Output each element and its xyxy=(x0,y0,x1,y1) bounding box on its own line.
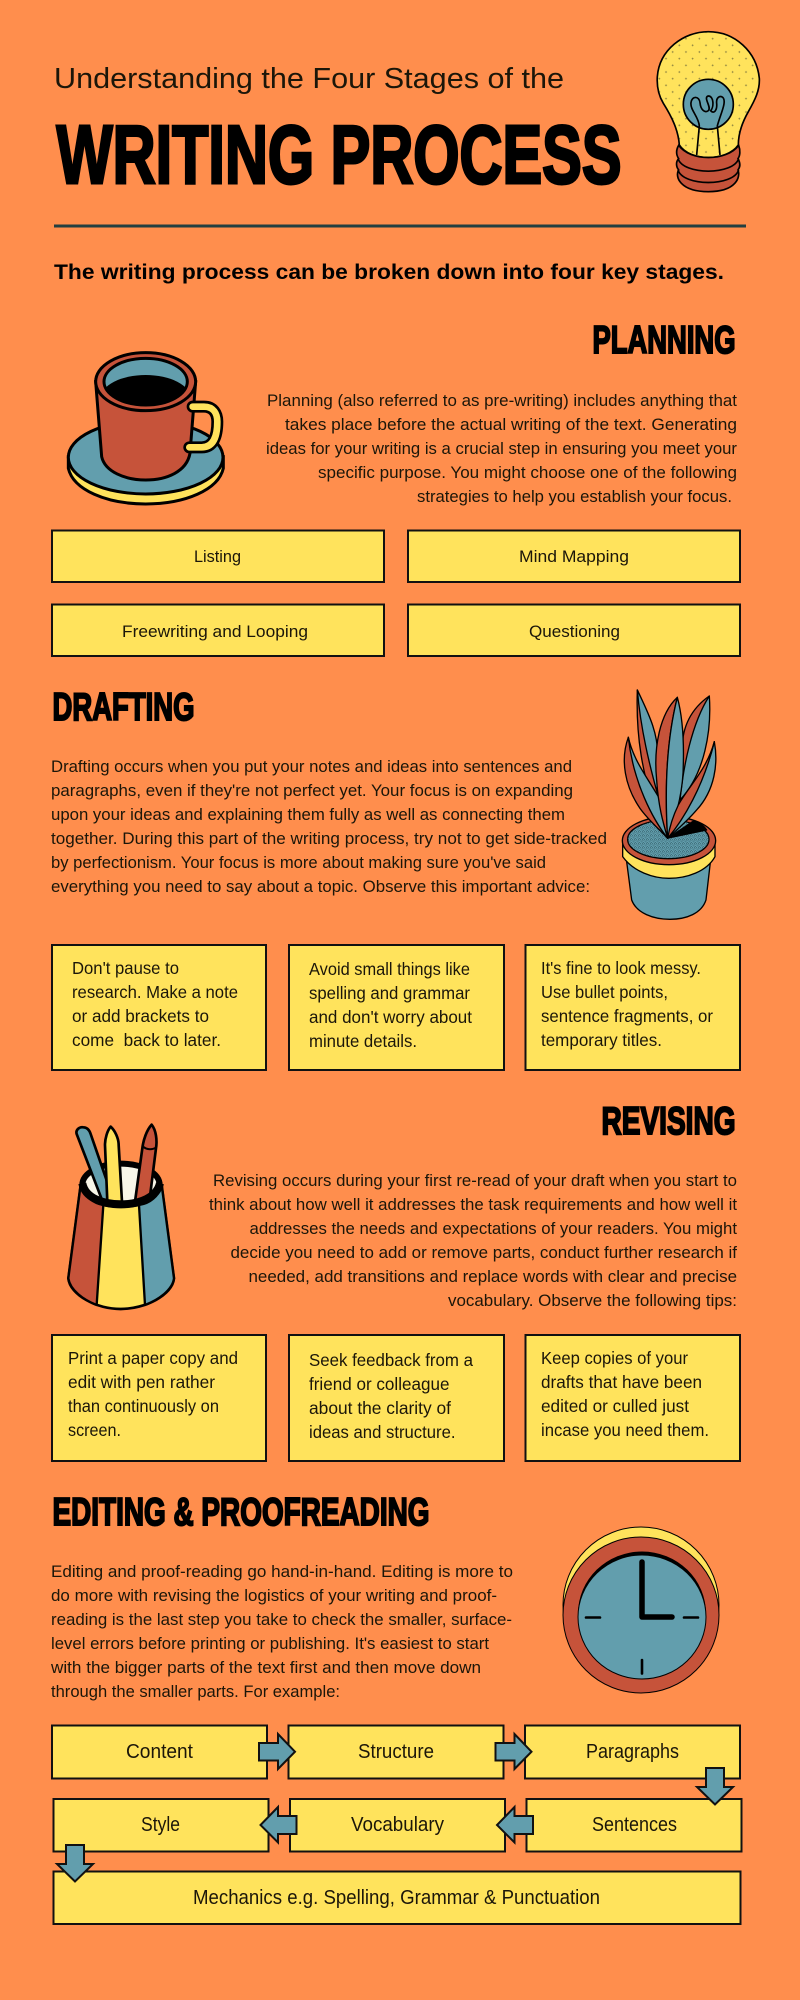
paragraph: editing: Editing and proof-reading go hand-in-hand. Editing is more to xyxy=(51,1562,513,1581)
arrow: content to structure xyxy=(259,1734,295,1769)
paragraph: drafting: paragraphs, even if they're not perfect yet. Your focus is on expanding xyxy=(51,781,573,800)
tip box: seek feedback: Seek feedback from a xyxy=(309,1350,473,1370)
flow box: mechanics: Mechanics e.g. Spelling, Grammar & Punctuation xyxy=(193,1886,600,1909)
flow box: vocabulary: Vocabulary xyxy=(351,1813,445,1836)
paragraph: planning: strategies to help you establish your focus. xyxy=(417,487,732,506)
header xyxy=(54,32,759,201)
flow box: paragraphs: Paragraphs xyxy=(586,1740,679,1763)
heading: editing and proofreading: EDITING & PROOFREADING xyxy=(52,1491,430,1534)
tip box: fine to look messy: It's fine to look messy. xyxy=(541,958,701,978)
subtitle: Understanding the Four Stages of the xyxy=(54,63,564,95)
tip box: keep copies: drafts that have been xyxy=(541,1372,702,1392)
section: planning xyxy=(52,319,740,656)
icon: coffee cup xyxy=(68,353,223,504)
paragraph: revising: decide you need to add or remove parts, conduct further research if xyxy=(230,1243,737,1262)
tip box: don't pause xyxy=(52,945,266,1070)
paragraph: revising xyxy=(209,1171,737,1310)
tip box: avoid small things: minute details. xyxy=(309,1031,417,1051)
box: questioning xyxy=(408,604,740,656)
paragraph: editing: through the smaller parts. For example: xyxy=(51,1682,340,1701)
arrow: paragraphs to sentences xyxy=(697,1768,733,1804)
tip box: keep copies: incase you need them. xyxy=(541,1420,709,1440)
paragraph: editing: do more with revising the logistics of your writing and proof- xyxy=(51,1586,497,1605)
flow box: style: Style xyxy=(141,1813,180,1836)
icon: clock xyxy=(563,1527,719,1693)
tip box: fine to look messy xyxy=(526,945,740,1070)
paragraph: editing: reading is the last step you take to check the smaller, surface- xyxy=(51,1610,512,1629)
paragraph: drafting: Drafting occurs when you put your notes and ideas into sentences and xyxy=(51,757,572,776)
flow box: structure xyxy=(288,1726,504,1778)
flow box: mechanics xyxy=(54,1872,740,1924)
flow box: content xyxy=(52,1726,267,1778)
paragraph: revising: needed, add transitions and replace words with clear and precise xyxy=(248,1267,737,1286)
section: editing and proofreading xyxy=(50,1491,741,1924)
tip box: seek feedback: about the clarity of xyxy=(309,1398,451,1418)
paragraph: revising: addresses the needs and expectations of your readers. You might xyxy=(250,1219,737,1238)
arrow: structure to paragraphs xyxy=(496,1734,532,1769)
tip box: print a paper copy: edit with pen rather xyxy=(68,1372,215,1392)
paragraph: planning: specific purpose. You might choose one of the following xyxy=(318,463,737,482)
flow box: style xyxy=(54,1799,268,1852)
paragraph: planning xyxy=(266,391,737,506)
tip box: don't pause: Don't pause to xyxy=(72,958,179,978)
heading: revising: REVISING xyxy=(602,1100,736,1143)
tip box: fine to look messy: temporary titles. xyxy=(541,1030,662,1050)
tip box: seek feedback: ideas and structure. xyxy=(309,1422,456,1442)
arrow: vocabulary to style xyxy=(260,1807,296,1842)
box: questioning: Questioning xyxy=(529,622,620,641)
intro sentence: The writing process can be broken down into four key stages. xyxy=(54,261,724,284)
paragraph: planning: Planning (also referred to as pre-writing) includes anything that xyxy=(267,391,737,410)
box: freewriting and looping: Freewriting and Looping xyxy=(122,622,308,641)
tip box: seek feedback: friend or colleague xyxy=(309,1374,450,1394)
tip box: don't pause: or add brackets to xyxy=(72,1006,209,1026)
flow box: structure: Structure xyxy=(358,1740,434,1763)
icon: potted plant xyxy=(622,690,716,919)
heading: drafting: DRAFTING xyxy=(52,686,194,729)
heading: planning: PLANNING xyxy=(592,319,736,362)
box: freewriting and looping xyxy=(52,604,384,656)
paragraph: drafting: upon your ideas and explaining them fully as well as connecting them xyxy=(51,805,565,824)
paragraph: drafting: by perfectionism. Your focus is more about making sure you've said xyxy=(51,853,546,872)
divider rule xyxy=(54,224,746,228)
flow box: vocabulary xyxy=(290,1799,505,1852)
tip box: avoid small things xyxy=(289,945,504,1070)
tip box: keep copies xyxy=(526,1335,740,1461)
flow box: sentences xyxy=(526,1799,742,1852)
tip box: print a paper copy: than continuously on xyxy=(68,1396,219,1416)
paragraph: editing xyxy=(50,1562,513,1701)
tip box: seek feedback xyxy=(289,1335,504,1461)
paragraph: revising: think about how well it addresses the task requirements and how well it xyxy=(209,1195,737,1214)
paragraph: editing: with the bigger parts of the text first and then move down xyxy=(50,1658,481,1677)
box: mind mapping xyxy=(408,530,740,582)
icon: pencil cup xyxy=(68,1125,174,1309)
tip box: keep copies: Keep copies of your xyxy=(541,1348,688,1368)
tip box: don't pause: research. Make a note xyxy=(72,982,238,1002)
paragraph: revising: Revising occurs during your first re-read of your draft when you start to xyxy=(213,1171,737,1190)
arrow: style to mechanics xyxy=(57,1845,93,1882)
tip box: don't pause: come back to later. xyxy=(72,1030,221,1050)
tip box: avoid small things: Avoid small things like xyxy=(309,959,470,979)
flow box: content: Content xyxy=(126,1740,193,1763)
arrow: sentences to vocabulary xyxy=(497,1807,533,1842)
tip box: avoid small things: and don't worry about xyxy=(309,1007,472,1027)
tip box: print a paper copy: screen. xyxy=(68,1420,121,1440)
flow box: sentences: Sentences xyxy=(592,1813,677,1836)
box: mind mapping: Mind Mapping xyxy=(519,547,629,566)
paragraph: drafting xyxy=(51,757,607,896)
tip box: print a paper copy xyxy=(52,1335,266,1461)
paragraph: editing: level errors before printing or publishing. It's easiest to start xyxy=(51,1634,489,1653)
paragraph: planning: takes place before the actual writing of the text. Generating xyxy=(285,415,737,434)
section: revising xyxy=(52,1100,740,1461)
tip box: fine to look messy: Use bullet points, xyxy=(541,982,668,1002)
paragraph: drafting: together. During this part of the writing process, try not to get side-tracked xyxy=(51,829,607,848)
box: listing xyxy=(52,530,384,582)
paragraph: revising: vocabulary. Observe the following tips: xyxy=(448,1291,737,1310)
icon: light bulb xyxy=(657,32,759,192)
paragraph: drafting: everything you need to say about a topic. Observe this important advice: xyxy=(51,877,590,896)
tip box: print a paper copy: Print a paper copy and xyxy=(68,1348,238,1368)
flow box: paragraphs xyxy=(525,1726,740,1778)
tip box: keep copies: edited or culled just xyxy=(541,1396,689,1416)
tip box: avoid small things: spelling and grammar xyxy=(309,983,470,1003)
section: drafting xyxy=(51,686,740,1070)
tip box: fine to look messy: sentence fragments, or xyxy=(541,1006,713,1026)
paragraph: planning: ideas for your writing is a crucial step in ensuring you meet your xyxy=(266,439,737,458)
box: listing: Listing xyxy=(194,547,241,566)
